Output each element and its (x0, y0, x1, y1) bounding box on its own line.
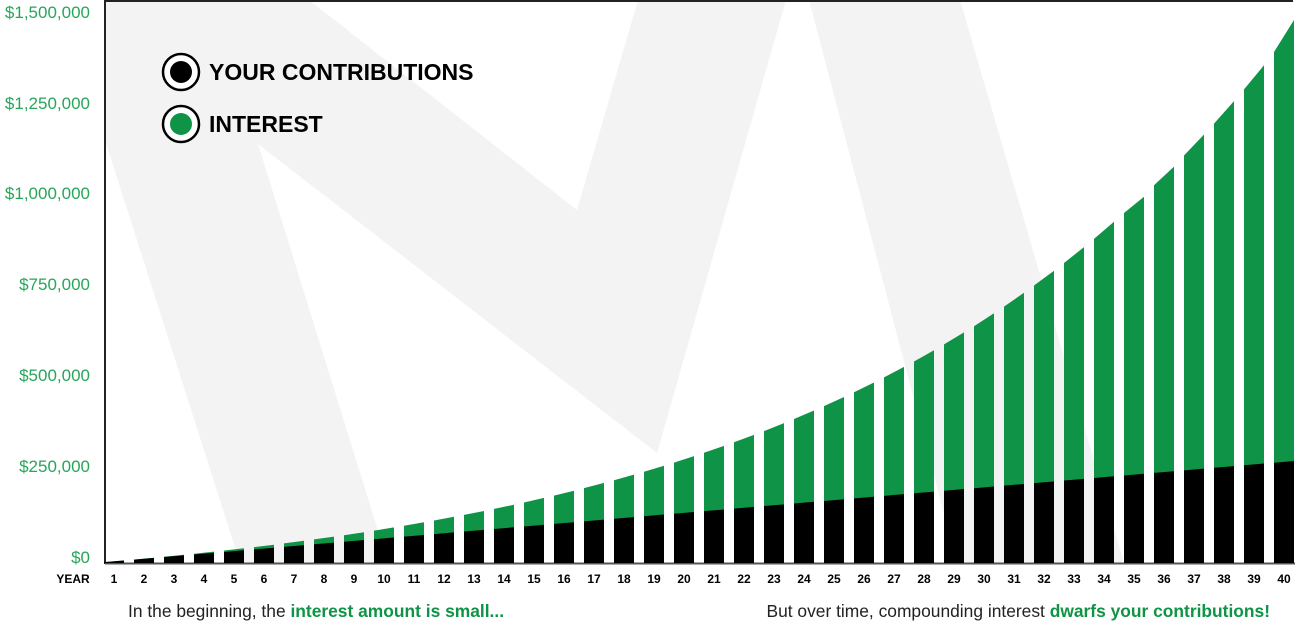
x-axis labels: 4 (201, 572, 208, 586)
x-axis labels: 9 (351, 572, 358, 586)
x-axis labels: 5 (231, 572, 238, 586)
x-axis labels: YEAR (56, 572, 90, 586)
x-axis labels: 3 (171, 572, 178, 586)
x-axis labels: 27 (887, 572, 901, 586)
x-axis labels: 24 (797, 572, 811, 586)
x-axis labels (56, 572, 1291, 586)
x-axis labels: 25 (827, 572, 841, 586)
legend item: your contributions (163, 54, 474, 90)
x-axis labels: 33 (1067, 572, 1081, 586)
y-axis labels: $250,000 (19, 457, 90, 476)
x-axis labels: 32 (1037, 572, 1051, 586)
x-axis labels: 18 (617, 572, 631, 586)
x-axis labels: 29 (947, 572, 961, 586)
legend item: interest (163, 106, 323, 142)
x-axis labels: 23 (767, 572, 781, 586)
y-axis labels: $750,000 (19, 275, 90, 294)
x-axis labels: 7 (291, 572, 298, 586)
x-axis labels: 2 (141, 572, 148, 586)
background watermark M shape (105, 0, 1124, 563)
caption right: But over time, compounding interest dwarfs your contributions! (766, 601, 1270, 621)
x-axis labels: 40 (1277, 572, 1291, 586)
x-axis labels: 19 (647, 572, 661, 586)
y-axis labels: $1,250,000 (5, 94, 90, 113)
x-axis labels: 31 (1007, 572, 1021, 586)
x-axis labels: 37 (1187, 572, 1201, 586)
y-axis labels: $1,500,000 (5, 3, 90, 22)
legend (163, 54, 474, 142)
x-axis labels: 6 (261, 572, 268, 586)
x-axis labels: 11 (408, 572, 421, 586)
x-axis labels: 26 (857, 572, 871, 586)
x-axis labels: 14 (497, 572, 511, 586)
x-axis labels: 36 (1157, 572, 1171, 586)
y-axis labels: $1,000,000 (5, 184, 90, 203)
x-axis labels: 13 (467, 572, 481, 586)
x-axis labels: 15 (527, 572, 541, 586)
y-axis labels: $0 (71, 548, 90, 567)
y-axis labels: $500,000 (19, 366, 90, 385)
x-axis labels: 1 (111, 572, 118, 586)
y-axis labels (5, 3, 90, 567)
x-axis labels: 20 (677, 572, 691, 586)
x-axis labels: 12 (437, 572, 451, 586)
x-axis labels: 8 (321, 572, 328, 586)
x-axis labels: 21 (707, 572, 721, 586)
x-axis labels: 28 (917, 572, 931, 586)
bar chart: interest (green) + contributions (black) (104, 20, 1294, 563)
x-axis labels: 16 (557, 572, 571, 586)
x-axis labels: 39 (1247, 572, 1261, 586)
x-axis labels: 34 (1097, 572, 1111, 586)
x-axis labels: 30 (977, 572, 991, 586)
x-axis labels: 35 (1127, 572, 1141, 586)
legend item: your contributions: YOUR CONTRIBUTIONS (209, 59, 474, 85)
x-axis labels: 17 (587, 572, 601, 586)
legend item: interest: INTEREST (209, 111, 323, 137)
x-axis labels: 22 (737, 572, 751, 586)
x-axis labels: 38 (1217, 572, 1231, 586)
caption left: In the beginning, the interest amount is small... (128, 601, 504, 621)
x-axis labels: 10 (377, 572, 391, 586)
